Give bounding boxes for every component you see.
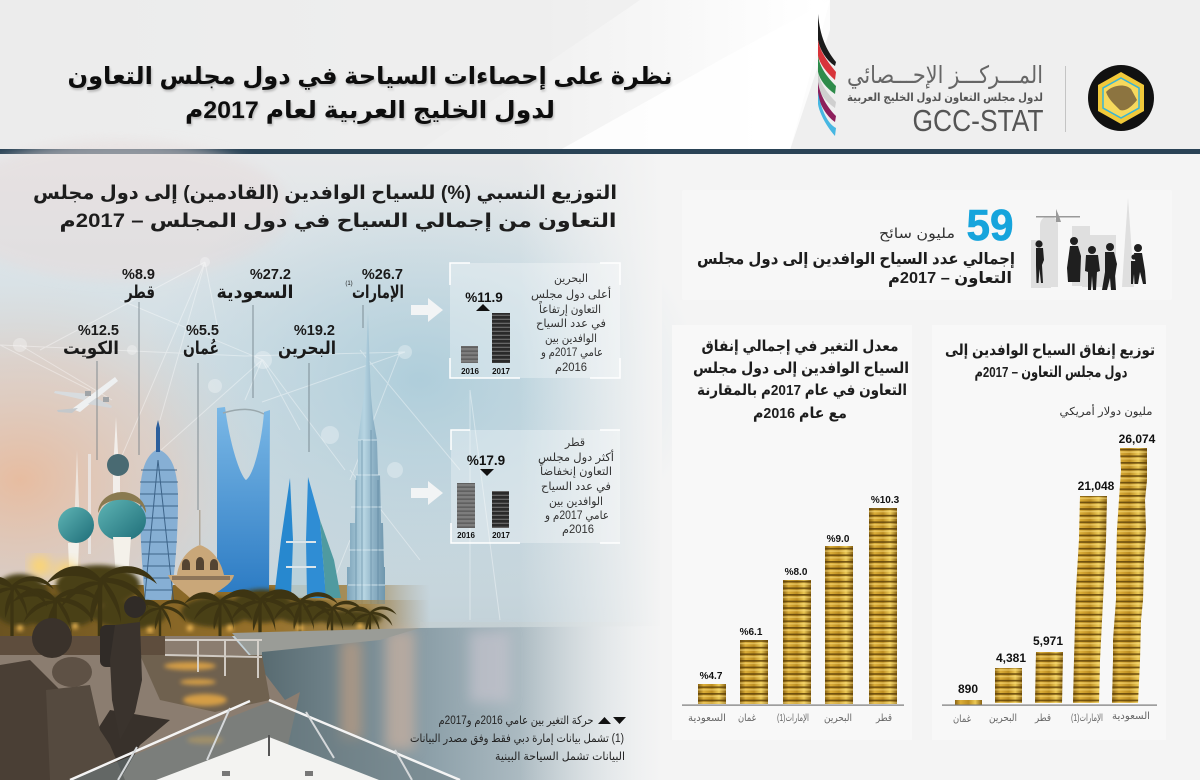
- sky: [0, 154, 660, 780]
- label: Oman: [183, 323, 219, 358]
- panel: left scene photo: [0, 140, 700, 780]
- value labels: %4.7: [700, 671, 723, 682]
- label: Qatar: [122, 267, 155, 303]
- footnotes: حركة التغير بين عامي 2016م و2017م: [438, 715, 594, 728]
- main title: نظرة على إحصاءات السياحة في دول مجلس التعاون: [68, 63, 672, 90]
- label: Qatar: %8.9: [122, 267, 155, 283]
- label: Oman: عُمان: [183, 337, 219, 358]
- shore ground: [0, 636, 300, 780]
- railing: [165, 640, 262, 678]
- city shoreline band: [0, 585, 430, 635]
- callout: Bahrain highest rise: [411, 263, 620, 378]
- people silhouettes: [1035, 237, 1146, 290]
- callout text: 2016م: [555, 362, 587, 374]
- label: Bahrain: %19.2: [294, 323, 335, 339]
- chart heading: دول مجلس التعاون – 2017م: [974, 364, 1128, 381]
- callout text: التعاون إرتفاعاً: [539, 300, 601, 317]
- country share labels: [63, 267, 404, 359]
- chart heading: السياح الوافدين إلى دول مجلس: [693, 360, 909, 377]
- bar: 2016: [457, 483, 475, 528]
- chart heading: معدل التغير في إجمالي إنفاق: [702, 338, 898, 355]
- percentage change: %17.9: [467, 453, 505, 468]
- icon: GCC emblem: [1088, 65, 1154, 131]
- big number 59: 59: [966, 201, 1014, 250]
- value labels: 890: [958, 682, 978, 696]
- chart heading: التعاون في عام 2017م بالمقارنة: [697, 382, 907, 399]
- main title: لدول الخليج العربية لعام 2017م: [185, 97, 555, 124]
- bar: 2016: [461, 346, 478, 363]
- icon: down triangle: [480, 469, 494, 476]
- logo GCC-STAT: GCC-STAT: [912, 103, 1044, 138]
- value labels: [700, 495, 900, 682]
- category labels: السعودية: [688, 713, 726, 724]
- value labels: %8.0: [785, 567, 808, 578]
- label: Saudi Arabia: [216, 267, 294, 303]
- boat: [70, 700, 460, 780]
- year labels: 2016: [461, 367, 479, 376]
- chart heading: توزيع إنفاق السياح الوافدين إلى: [945, 342, 1155, 359]
- label: Oman: %5.5: [186, 323, 219, 339]
- label: Bahrain: البحرين: [278, 338, 336, 359]
- value labels: %10.3: [871, 495, 900, 506]
- total tourists text: إجمالي عدد السياح الوافدين إلى دول مجلس: [697, 251, 1015, 269]
- panel: total tourists: [682, 190, 1172, 300]
- label: UAE: (1): [345, 281, 353, 287]
- icon: arrow: [411, 298, 443, 322]
- chart heading: [693, 338, 909, 422]
- callout text: في عدد السياح: [536, 318, 606, 330]
- footnotes: البيانات تشمل السياحة البينية: [495, 751, 625, 763]
- icon: trend triangles: [598, 717, 626, 724]
- value labels: %9.0: [827, 534, 850, 545]
- icon: arrow: [411, 481, 443, 505]
- callout text: أعلى دول مجلس: [531, 286, 611, 302]
- dome tower: [168, 510, 234, 598]
- year labels: 2017: [492, 367, 510, 376]
- label: UAE: %26.7: [362, 267, 403, 283]
- Kingdom tower: [217, 407, 270, 592]
- Doha tower: [140, 420, 178, 612]
- chart heading: [945, 342, 1155, 381]
- category labels: قطر: [1034, 713, 1051, 724]
- total tourists text: [697, 251, 1015, 287]
- callout text: الوافدين بين: [545, 333, 597, 346]
- value labels: 21,048: [1078, 479, 1115, 493]
- callout text: قطر: [564, 437, 585, 450]
- label: Saudi Arabia: %27.2: [250, 267, 291, 283]
- percentage change: %11.9: [465, 290, 503, 305]
- bar chart: coins: [682, 508, 904, 706]
- logo subtitle: لدول مجلس التعاون لدول الخليج العربية: [847, 92, 1043, 104]
- Bahrain WTC: [274, 477, 341, 598]
- label: Bahrain: [278, 323, 336, 359]
- icon: plane: [1036, 209, 1080, 222]
- callout text: البحرين: [554, 273, 588, 286]
- callout: Qatar highest drop: [411, 430, 620, 543]
- silhouettes of people: [0, 596, 170, 780]
- callout text: عامي 2017م و: [540, 347, 603, 360]
- Kuwait towers: [58, 417, 146, 590]
- label: Kuwait: الكويت: [63, 338, 119, 359]
- unit: مليون دولار أمريكي: [1060, 404, 1153, 418]
- category labels: [953, 711, 1150, 725]
- year labels: [461, 367, 510, 376]
- label: UAE: الإمارات: [352, 282, 404, 302]
- bar: 2017: [492, 491, 509, 528]
- category labels: الإمارات(1): [1071, 713, 1103, 724]
- heading: distribution share: [33, 183, 617, 232]
- callout text: عامي 2017م و: [544, 510, 609, 523]
- million tourists: مليون سائح: [879, 225, 955, 242]
- callout text: الوافدين بين: [549, 496, 603, 509]
- fade to page: [520, 154, 662, 780]
- water: [255, 626, 660, 780]
- year labels: [457, 531, 510, 540]
- callout text: 2016م: [562, 524, 594, 536]
- label: Qatar: قطر: [124, 282, 155, 303]
- category labels: غمان: [953, 714, 971, 725]
- heading: distribution share: التوزيع النسبي (%) للسياح الوافدين (القادمين) إلى دول مجلس: [33, 183, 617, 204]
- category labels: الإمارات(1): [777, 713, 809, 724]
- panel: spending change chart: [672, 325, 912, 740]
- footnotes: (1) تشمل بيانات إمارة دبي فقط وفق مصدر البيانات: [410, 733, 624, 746]
- category labels: البحرين: [989, 713, 1017, 724]
- header band: [0, 0, 1200, 154]
- callout text: التعاون إنخفاضاً: [540, 462, 612, 479]
- label: Kuwait: %12.5: [78, 323, 119, 339]
- category labels: قطر: [875, 713, 892, 724]
- label: Saudi Arabia: السعودية: [216, 282, 294, 303]
- label: Kuwait: [63, 323, 119, 359]
- logo arabic name: المـــركـــز الإحـــصائي: [847, 62, 1043, 89]
- category labels: البحرين: [824, 713, 852, 724]
- main title: [68, 63, 672, 124]
- panel: tourist spending chart: [932, 325, 1166, 740]
- callout text: أكثر دول مجلس: [538, 449, 614, 465]
- callout text: [538, 437, 614, 536]
- icon: up triangle: [476, 304, 490, 311]
- category labels: غمان: [738, 713, 756, 724]
- heading: distribution share: التعاون من إجمالي السياح في دول المجلس – 2017م: [60, 211, 616, 232]
- total tourists text: التعاون – 2017م: [888, 270, 1012, 287]
- chart heading: مع عام 2016م: [753, 405, 847, 422]
- callout text: في عدد السياح: [541, 481, 611, 493]
- palm trees and lights: [0, 556, 430, 670]
- year labels: 2016: [457, 531, 475, 540]
- label: UAE: [345, 267, 404, 302]
- callout text: [531, 273, 611, 374]
- bar: 2017: [492, 313, 510, 363]
- skyline silhouette: [1031, 198, 1134, 288]
- icon: airplane: [54, 377, 118, 413]
- GCC-STAT logo: [818, 14, 1154, 138]
- year labels: 2017: [492, 531, 510, 540]
- value labels: 26,074: [1119, 432, 1156, 446]
- category labels: [688, 713, 892, 724]
- footnotes: [410, 715, 626, 763]
- waterfront promenade: [232, 628, 420, 668]
- value labels: 5,971: [1033, 634, 1063, 648]
- value labels: %6.1: [740, 627, 763, 638]
- Burj Khalifa: [347, 313, 385, 604]
- value labels: [958, 432, 1156, 696]
- value labels: 4,381: [996, 651, 1026, 665]
- bar chart: coins: [942, 448, 1157, 706]
- category labels: السعودية: [1112, 711, 1150, 722]
- icon: ribbon: [818, 14, 836, 136]
